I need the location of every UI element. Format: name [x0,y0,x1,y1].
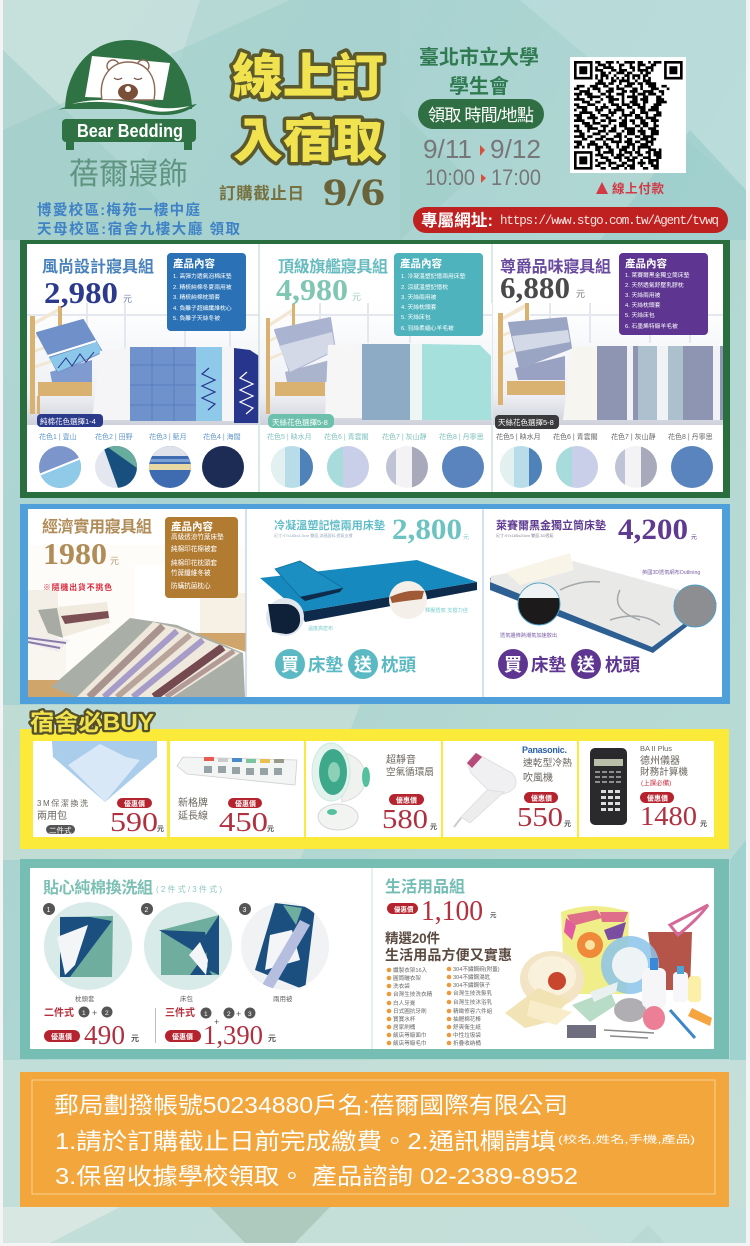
contents box: 3. 精梳純棉枕頭套 [173,293,220,301]
contents box: 高級透涼竹蓆床墊 [171,532,224,541]
buy mattress get pillow: 送 [354,655,372,675]
contents box: 4. 負離子超細纖維枕心 [173,304,232,312]
heading and price [276,257,388,307]
colour labels [267,432,484,441]
three-piece price: 三件式 [165,1006,195,1019]
contents box: 1. 萊賽爾黑金獨立筒床墊 [625,271,690,279]
product: hair dryer: 速乾型冷熱 [523,756,572,769]
heading and price: 尊爵品味寢具組 [500,257,611,276]
heading and price [42,517,152,592]
colour labels: 花色8 | 丹寧思 [668,432,713,441]
bed photo 1 [27,303,259,425]
colour labels: 花色7 | 灰山靜 [382,432,427,441]
fabric tag: 天絲花色選擇5-8 [272,417,328,427]
product: 3M sheet [33,741,167,837]
item list: 白人牙膏 [393,999,416,1007]
pickup time pill [418,99,544,129]
heading and price: 頂級旗艦寢具組 [278,257,388,276]
panel: payment information: (校名,姓名,手機,產品) [558,1133,695,1146]
heading: 宿舍必BUY [30,709,154,735]
item list: 舒爽衛生紙 [453,1023,481,1031]
order deadline [219,171,385,214]
colour labels: 花色7 | 灰山靜 [611,432,656,441]
dedicated URL bar: https://www.stgo.com.tw/Agent/tvwq [500,214,719,228]
swatches [271,446,484,488]
title: 線上訂 入宿取: 線上訂 [232,51,384,104]
daily goods set: 元 [490,911,497,919]
contents box: 6. 石墨烯特級羊毛被 [625,322,678,330]
colour labels: 花色5 | 映水月 [496,432,541,441]
product: financial calculator: 德州儀器 [640,754,680,767]
colour labels [496,432,713,441]
two-piece price: 490 [84,1020,125,1050]
bed photo 3 [493,303,723,425]
buy mattress get pillow [275,649,416,679]
pickup campuses: 天母校區:宿舍九樓大廳 領取 [37,220,240,238]
colour labels: 花色4 | 海闊 [203,432,241,441]
item list: 日式圓抗牙刷 [393,1007,427,1015]
product: power strip: 元 [267,825,274,833]
colour labels: 花色5 | 映水月 [267,432,312,441]
item list: 台灣生技沐浴乳 [453,998,493,1006]
item 3 duvet: 兩用被 [273,994,293,1003]
cooling foam mattress: 冷凝溫塑記憶兩用床墊 [274,518,385,532]
panel: value set and mattresses [20,504,730,704]
two-piece price: 二件式 [44,1006,74,1019]
product: financial calculator: BA II Plus [640,744,672,753]
cotton replacement set: (2件式/3件式) [156,884,222,894]
school name: 臺北市立大學 [419,45,539,69]
item list: 飯店等級毛巾 [393,1039,427,1047]
logo: Bear Bedding: 蓓爾寢飾 [69,158,188,191]
contents box: 3. 天絲兩用被 [625,291,661,299]
product: financial calculator: (上課必備) [641,778,671,787]
product: circulation fan: 優惠價 [396,796,417,804]
contents box: 竹蓆纖維冬被 [171,568,211,577]
buy mattress get pillow: 床墊 [531,655,566,675]
photo: striped bed [28,590,246,697]
online payment caption: 線上付款 [612,181,664,196]
contents box: 純棉印花棉被套 [171,544,218,553]
panel: payment information: 3.保留收據學校領取。 產品諮詢 02-2389-8952 [55,1163,578,1189]
two-piece price: 優惠價 [51,1032,72,1041]
logo: Bear Bedding: Bear Bedding [77,120,183,141]
three-piece price [165,1006,276,1050]
contents box: 6. 羽絲柔緬心羊毛被 [401,324,454,332]
product: hair dryer: 元 [564,820,571,828]
pickup dates and times: 9/11 [423,134,472,164]
cotton replacement set [43,878,329,1050]
buy mattress get pillow: 買 [281,655,299,675]
product: circulation fan: 超靜音 [386,753,416,766]
buy mattress get pillow [498,649,640,679]
product: hair dryer: 優惠價 [531,794,552,802]
contents box [165,517,238,598]
pickup campuses [37,201,240,238]
contents box: 產品內容 [625,257,667,270]
daily goods set: 精選20件 [385,930,440,946]
item list: 飯店等級面巾 [393,1031,427,1039]
dedicated URL bar [413,207,728,233]
contents box: 4. 天絲枕頭套 [401,303,437,311]
title: 線上訂 入宿取: 入宿取 [233,115,383,168]
product: 3M sheet: 590 [110,807,158,837]
bedding set 1 [27,253,259,490]
buy mattress get pillow: 送 [577,655,595,675]
colour labels: 花色3 | 藍月 [149,432,187,441]
logo: Bear Bedding [58,40,197,191]
product: hair dryer: Panasonic. [522,745,567,755]
three-piece price: + [236,1009,241,1019]
panel: payment information: 1.請於訂購截止日前完成繳費。2.通訊欄請填 [55,1128,556,1154]
contents box: 5. 負離子天絲冬被 [173,314,220,322]
item 1 pillowcase: 枕頭套 [75,994,95,1003]
item list: 304不鏽鋼湯匙 [453,973,491,981]
colour labels: 花色8 | 丹寧思 [439,432,484,441]
swatches [500,446,713,488]
product: power strip [170,741,304,837]
mattress illustration [260,560,477,636]
two-piece price: 元 [131,1034,139,1043]
pickup dates and times: 10:00 [425,165,475,190]
heading and price [500,257,611,305]
contents box: 3. 天絲兩用被 [401,293,437,301]
colour labels [39,432,241,441]
product: power strip: 延長線 [178,809,208,822]
two-piece price: + [92,1008,97,1018]
product: 3M sheet: 3M保潔換洗 [37,798,88,808]
heading and price: 經濟實用寢具組 [42,517,152,536]
lyocell spring mattress: 4,200 [618,513,688,546]
cooling foam mattress: 2,800 [392,513,462,546]
heading and price [42,257,154,310]
mattress illustration [490,553,717,653]
colour labels: 花色1 | 壹山 [39,432,77,441]
buy mattress get pillow: 買 [504,655,522,675]
pickup dates and times: 9/12 [490,134,541,164]
bed photo 2 [260,303,492,425]
heading and price: 元 [352,292,361,302]
three-piece price: 1 [204,1011,208,1018]
panel: payment information [20,1072,729,1207]
product: power strip: 優惠價 [235,799,256,808]
mattress illustration: 釋壓透氣 支撐力佳 [425,606,468,614]
heading and price: 元 [110,556,119,566]
item 2 fitted sheet: 2 [144,907,148,914]
heading and price: 1980 [43,536,107,571]
order deadline: 訂購截止日 [219,183,304,203]
item list: 精緻修容六件組 [453,1007,493,1015]
product: 3M sheet: 二件式 [49,825,72,835]
pickup dates and times [423,134,541,190]
contents box: 2. 涼感溫塑記憶枕 [401,283,448,291]
contents box: 產品內容 [400,257,442,270]
contents box: 2. 天然透氣舒壓乳膠枕 [625,281,684,289]
item 2 fitted sheet: 床包 [180,994,194,1003]
daily goods photo [505,905,712,1038]
product: circulation fan: 空氣循環扇 [386,766,434,778]
cooling foam mattress [260,513,477,679]
item list: 洗衣袋 [393,982,410,990]
heading and price: 4,980 [276,272,348,307]
two-piece price: 2 [105,1010,109,1017]
lyocell spring mattress: 萊賽爾黑金獨立筒床墊 [496,518,606,532]
item 1 pillowcase: 1 [46,907,50,914]
bedding set 2 [260,253,492,488]
product: financial calculator: 財務計算機 [640,766,688,778]
contents box [619,253,708,335]
item list: 抽屜棉花棒 [453,1015,481,1023]
heading and price: 風尚設計寢具組 [42,257,154,276]
contents box [167,253,246,331]
item 3 duvet [239,902,329,1003]
school name: 學生會 [449,74,509,98]
product: hair dryer [443,741,577,837]
mattress illustration: 英國3D透氣網布Outlining [642,568,700,576]
panel: bedding wash sets and daily goods [20,859,729,1059]
colour labels: 花色6 | 青雲閣 [553,432,598,441]
contents box: 產品內容 [171,520,213,533]
dividers [246,509,483,697]
buy mattress get pillow: 枕頭 [381,655,416,675]
item list: 304不鏽鋼碗(附蓋) [453,965,500,973]
contents box: 產品內容 [173,257,215,270]
pickup dates and times: 17:00 [491,165,541,190]
three-piece price: 1,390 [203,1020,263,1050]
item list [387,965,500,1047]
heading and price: ※隨機出貨不挑色 [43,582,112,592]
daily goods set: 生活用品組 [385,877,465,896]
product: power strip: 新格牌 [178,796,208,809]
item list: 304不鏽鋼筷子 [453,981,491,989]
buy mattress get pillow: 床墊 [308,655,343,675]
heading and price: 6,880 [500,270,570,305]
item list: 纖製衣架16入 [393,966,428,974]
fabric tag [268,414,334,428]
lyocell spring mattress: 元 [691,534,697,541]
cooling foam mattress: 元 [463,534,469,541]
pickup campuses: 博愛校區:梅苑一樓中庭 [37,201,200,219]
product: 3M sheet: 兩用包 [37,809,67,822]
product: financial calculator: 1480 [640,801,697,831]
contents box [394,253,483,336]
item 3 duvet: 3 [242,907,246,914]
panel: payment information: 郵局劃撥帳號50234880戶名:蓓爾國際有限公司 [54,1092,568,1118]
contents box: 5. 天絲床包 [401,313,431,321]
heading and price: 2,980 [44,275,118,310]
fabric tag [495,415,559,429]
product: power strip: 450 [219,807,268,837]
swatches [39,446,244,490]
item list: 圓筒曬衣架 [393,974,421,982]
contents box: 4. 天絲枕頭套 [625,301,661,309]
two-piece price [44,1006,139,1050]
item list: 台灣生技洗髮乳 [453,989,493,997]
cooling foam mattress: 尺寸:97x185x4.5cm 雙面,涼感面料,透氣支撐 [274,532,352,538]
cotton replacement set: 貼心純棉換洗組 [43,878,153,897]
lyocell spring mattress: 尺寸:97x185x20cm 雙面,3D透氣 [496,532,553,538]
contents box: 1. 高彈力透氣泡棉床墊 [173,272,232,280]
two-piece price: 1 [82,1010,86,1017]
three-piece price: + [214,1017,219,1027]
panel: bedding sets [20,240,730,498]
item 2 fitted sheet [141,902,232,1003]
bedding set 3 [493,253,723,488]
product: financial calculator [579,741,714,837]
order deadline: 9/6 [323,171,385,214]
pickup time pill: 領取 時間/地點 [428,106,534,125]
product: circulation fan: 元 [430,823,437,831]
three-piece price: 元 [268,1034,276,1043]
product: circulation fan [306,741,441,837]
product: financial calculator: 元 [700,820,707,828]
three-piece price: 優惠價 [172,1032,193,1041]
item list: 中性垃圾袋 [453,1031,481,1039]
heading and price: 元 [123,294,132,304]
fabric tag [37,414,103,427]
colour labels: 花色6 | 青雲閣 [324,432,369,441]
product: hair dryer: 550 [517,802,563,832]
contents box: 5. 天絲床包 [625,311,655,319]
three-piece price: 2 [227,1011,231,1018]
three-piece price: 3 [248,1011,252,1018]
lyocell spring mattress [490,513,717,679]
contents box: 防蟎抗菌枕心 [171,581,211,590]
contents box: 純棉印花枕頭套 [171,558,218,567]
icon: sleeping bear on pillow [58,40,197,115]
contents box: 2. 精梳純棉冬夏兩用被 [173,283,232,291]
title: 線上訂 入宿取 [232,51,384,168]
daily goods set: 優惠價 [394,904,414,914]
contents box: 1. 冷凝溫塑記憶兩用床墊 [401,272,466,280]
fabric tag: 純棉花色選擇1-4 [40,416,96,426]
product: financial calculator: 優惠價 [647,794,668,802]
daily goods set [385,877,712,1047]
item list: 寶寶水杯 [393,1015,416,1023]
school name [419,45,539,98]
daily goods set: 生活用品方便又實惠 [385,947,512,963]
divider [259,244,492,492]
buy mattress get pillow: 枕頭 [605,655,640,675]
product: circulation fan: 580 [382,804,428,834]
item list: 折疊收納桶 [453,1039,481,1047]
QR code [570,57,686,173]
fabric tag: 天絲花色選擇5-8 [498,417,554,427]
heading and price: 元 [576,289,585,299]
dedicated URL bar: 專屬網址: [421,211,493,230]
product: hair dryer: 吹風機 [523,771,553,784]
panel: dorm must-buy [20,709,729,849]
item list: 台灣生技洗衣精 [393,990,433,998]
item 1 pillowcase [43,902,132,1003]
product: 3M sheet: 元 [157,825,164,833]
product: 3M sheet: 優惠價 [124,799,145,808]
economy bedding set [28,517,250,700]
mattress illustration: 透氣邊條熱潮氣加速散出 [500,631,557,639]
mattress illustration: 溫度高密布 [308,625,333,632]
daily goods set: 1,100 [421,896,483,927]
item list: 居家刷桶 [393,1023,416,1031]
colour labels: 花色2 | 田野 [95,432,133,441]
